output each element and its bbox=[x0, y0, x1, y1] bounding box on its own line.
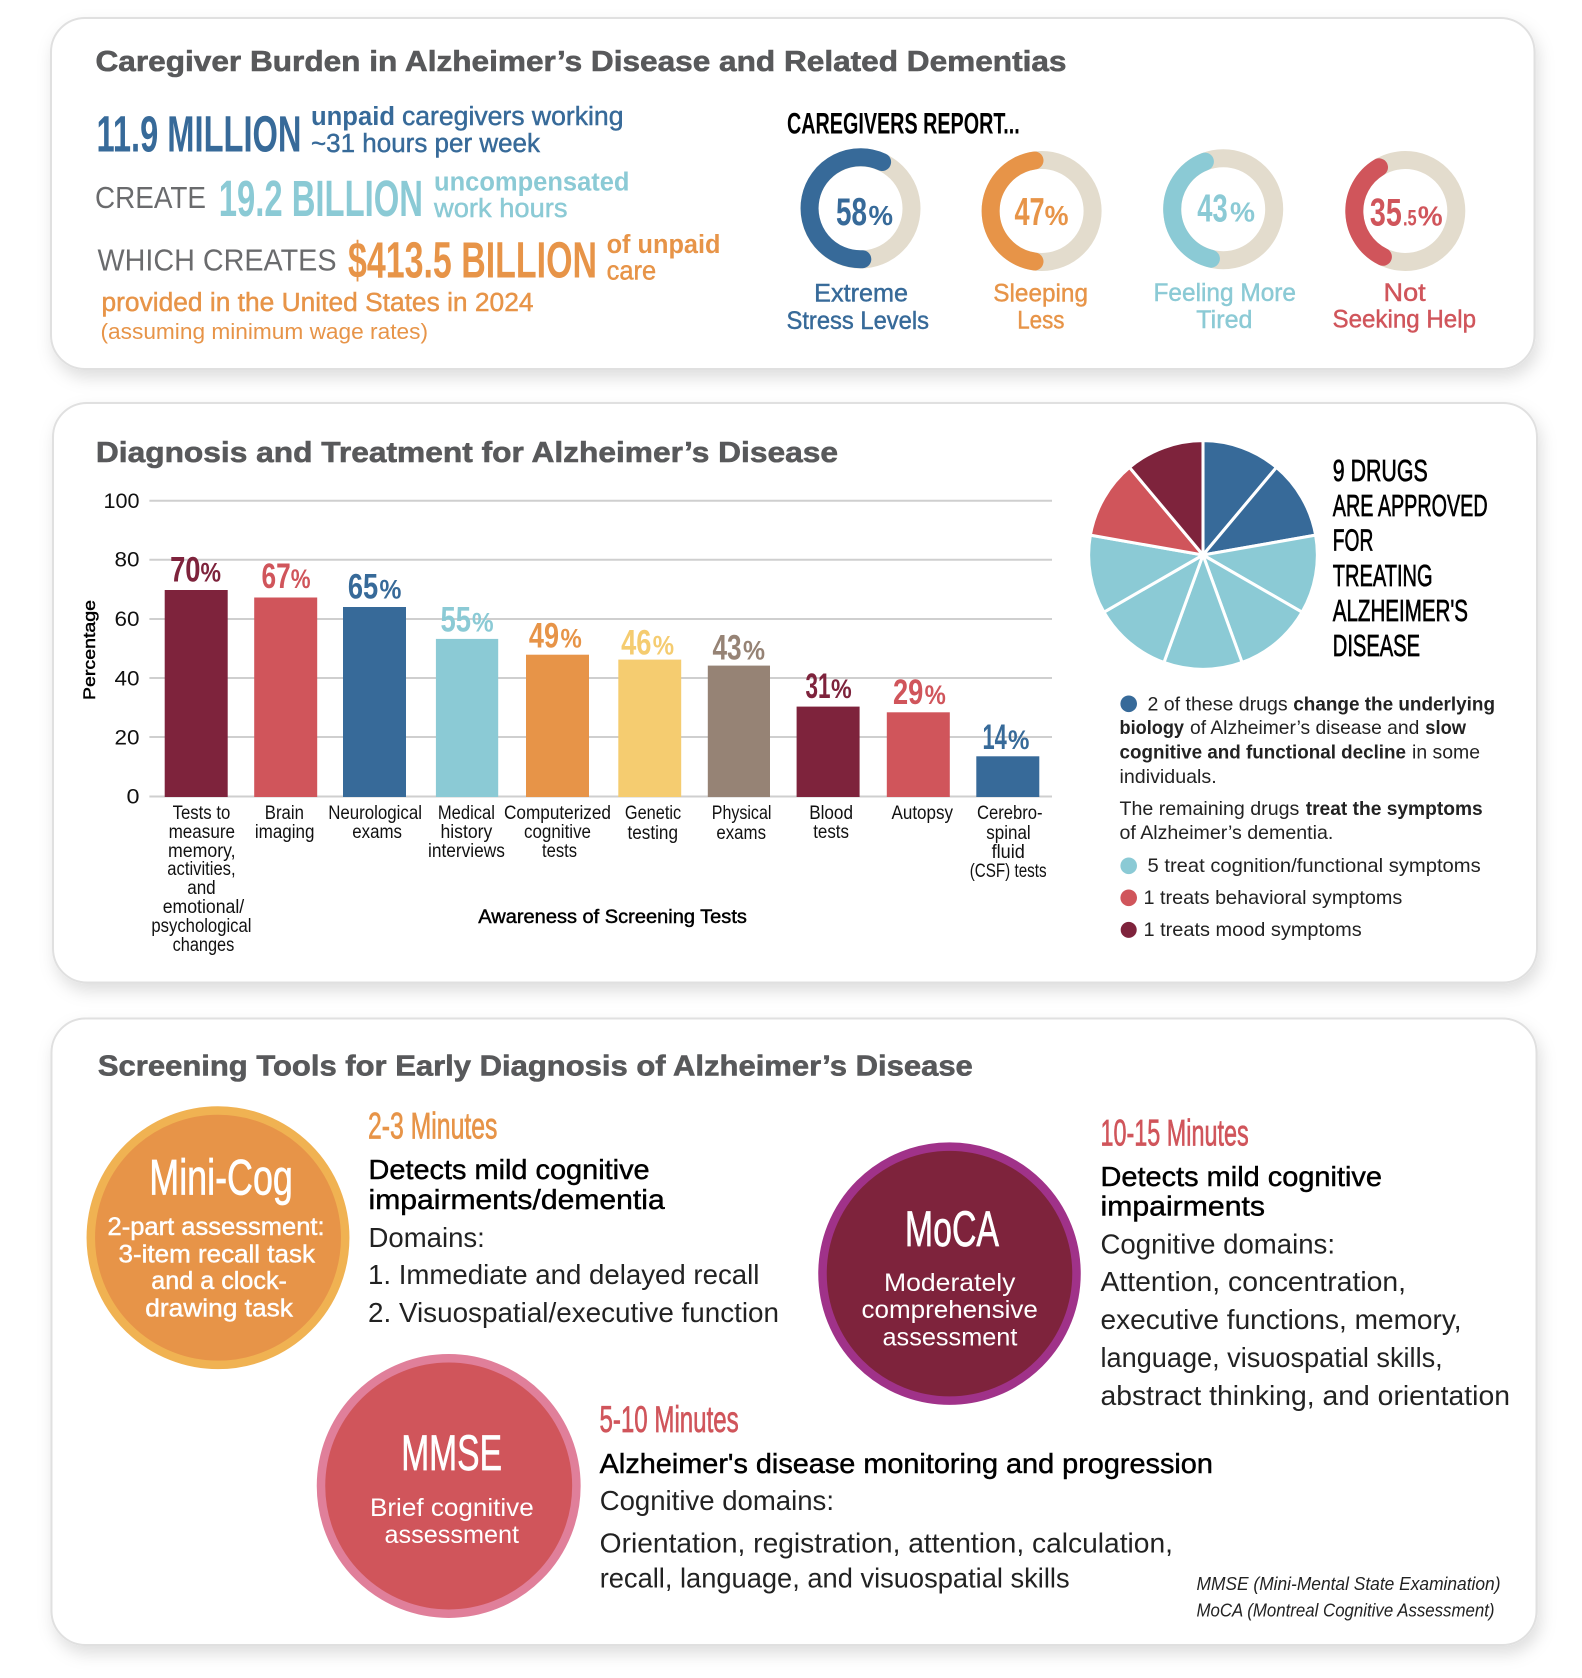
bar: cerebrospinal fluid tests 14%: fluid bbox=[992, 842, 1025, 863]
bar: computerized cognitive tests 49%: tests bbox=[542, 841, 577, 862]
donut: not seeking help 35.5%: % bbox=[1418, 201, 1443, 232]
text block: Mini-Cog details: 2-3 Minutes bbox=[368, 1106, 497, 1146]
donut: sleeping less 47% bbox=[991, 160, 1093, 334]
legend item: blue, disease modifying: of Alzheimer’s disease and bbox=[1190, 717, 1419, 739]
bar: tests to measure memory 70%: and bbox=[187, 878, 216, 899]
legend item: blue, disease modifying: individuals. bbox=[1120, 766, 1217, 788]
bar: tests to measure memory 70%: 70 bbox=[170, 551, 200, 590]
bar: physical exams 43% bbox=[708, 629, 771, 844]
text block: MoCA details: executive functions, memory, bbox=[1100, 1304, 1462, 1335]
bar: physical exams 43%: % bbox=[743, 636, 765, 666]
pie chart: 9 approved drugs bbox=[1089, 441, 1317, 669]
text block: Mini-Cog details: impairments/dementia bbox=[368, 1184, 665, 1215]
pie title: 9 drugs approved: ARE APPROVED bbox=[1333, 488, 1488, 523]
panel background bbox=[53, 403, 1537, 982]
text block: MoCA details: Cognitive domains: bbox=[1100, 1229, 1335, 1260]
bar: medical history interviews 55%: % bbox=[472, 607, 494, 637]
text block: MMSE details: Orientation, registration, attention, calculation, bbox=[600, 1528, 1173, 1558]
text block: MoCA details: abstract thinking, and orientation bbox=[1100, 1380, 1510, 1411]
donut: extreme stress levels 58% bbox=[786, 157, 929, 335]
bar: medical history interviews 55%: history bbox=[440, 822, 493, 843]
bar chart: awareness of screening tests bbox=[80, 490, 1052, 956]
donut: not seeking help 35.5%: .5 bbox=[1403, 206, 1417, 231]
pie title: 9 drugs approved: DISEASE bbox=[1333, 628, 1420, 663]
donut: extreme stress levels 58%: 58 bbox=[836, 191, 867, 234]
circle: MoCA: Moderately bbox=[884, 1269, 1016, 1297]
bar: physical exams 43%: Physical bbox=[712, 803, 771, 824]
circle: Mini-Cog: 2-part assessment: bbox=[108, 1213, 325, 1241]
y axis ticks bbox=[104, 490, 140, 808]
bar: genetic testing 46%: 46 bbox=[621, 624, 651, 663]
bar: autopsy 29%: % bbox=[925, 680, 946, 710]
bar: medical history interviews 55%: Medical bbox=[438, 803, 495, 824]
legend item: red, behavioral: 1 treats behavioral symptoms bbox=[1144, 887, 1403, 909]
stat: 19.2 billion work hours: uncompensated bbox=[434, 168, 630, 196]
legend: drug categories bbox=[1120, 693, 1495, 941]
footnote: abbreviations: MMSE (Mini-Mental State Examination) bbox=[1196, 1573, 1500, 1594]
y axis ticks: 80 bbox=[114, 549, 140, 572]
legend item: blue, disease modifying: cognitive and functional decline bbox=[1120, 742, 1406, 764]
stat: 11.9 million caregivers: caregivers working bbox=[402, 103, 624, 131]
circle: Mini-Cog bbox=[91, 1110, 345, 1365]
text block: Mini-Cog details: Domains: bbox=[368, 1222, 485, 1253]
stat: 11.9 million caregivers: unpaid bbox=[311, 103, 395, 131]
donut: sleeping less 47%: Less bbox=[1017, 306, 1064, 334]
bar: genetic testing 46%: testing bbox=[628, 823, 678, 844]
heading: caregiver burden: Caregiver Burden in Alzheimer’s Disease and Related Dementias bbox=[96, 46, 1066, 78]
panel: caregiver burden bbox=[51, 18, 1534, 369]
donut: not seeking help 35.5%: Not bbox=[1384, 279, 1426, 307]
stat: 11.9 million caregivers: 11.9 MILLION bbox=[96, 106, 302, 162]
bar: cerebrospinal fluid tests 14%: % bbox=[1008, 725, 1029, 755]
text block: MoCA details: Attention, concentration, bbox=[1100, 1266, 1406, 1297]
bar: autopsy 29% bbox=[887, 673, 953, 824]
bar: neurological exams 65%: Neurological bbox=[328, 803, 422, 824]
legend text: remaining drugs: treat the symptoms bbox=[1306, 798, 1483, 820]
bar: tests to measure memory 70%: memory, bbox=[168, 841, 236, 862]
heading: screening tools: Screening Tools for Early Diagnosis of Alzheimer’s Disease bbox=[98, 1050, 973, 1082]
stat: 19.2 billion work hours: work hours bbox=[433, 195, 568, 223]
pie title: 9 drugs approved bbox=[1333, 453, 1488, 663]
bar: tests to measure memory 70%: emotional/ bbox=[163, 897, 245, 918]
legend item: teal, cognition: 5 treat cognition/functional symptoms bbox=[1148, 855, 1481, 877]
donut: extreme stress levels 58%: % bbox=[868, 200, 893, 231]
legend text: remaining drugs: The remaining drugs bbox=[1120, 798, 1300, 820]
bar: autopsy 29%: Autopsy bbox=[892, 803, 953, 824]
bar: tests to measure memory 70%: % bbox=[200, 558, 221, 588]
footnote: abbreviations: MoCA (Montreal Cognitive Assessment) bbox=[1196, 1600, 1494, 1620]
stat: 413.5 billion unpaid care: WHICH CREATES bbox=[98, 243, 336, 278]
panel background bbox=[51, 18, 1534, 369]
stat: 11.9 million caregivers: ~31 hours per week bbox=[311, 130, 540, 158]
circle: Mini-Cog: Mini-Cog bbox=[149, 1150, 293, 1206]
bar: medical history interviews 55% bbox=[428, 600, 505, 862]
pie title: 9 drugs approved: ALZHEIMER'S bbox=[1333, 593, 1468, 628]
donut: extreme stress levels 58%: Stress Levels bbox=[786, 307, 929, 335]
text block: MoCA details: impairments bbox=[1100, 1191, 1265, 1222]
legend item: blue, disease modifying: biology bbox=[1120, 717, 1184, 739]
legend text: remaining drugs: of Alzheimer’s dementia. bbox=[1120, 822, 1333, 844]
y axis ticks: 100 bbox=[104, 490, 140, 513]
pie title: 9 drugs approved: 9 DRUGS bbox=[1333, 453, 1428, 488]
donut: feeling more tired 43%: % bbox=[1230, 197, 1255, 228]
bar: computerized cognitive tests 49% bbox=[504, 617, 611, 862]
donut: not seeking help 35.5%: 35 bbox=[1370, 192, 1402, 235]
bar: tests to measure memory 70%: Tests to bbox=[173, 803, 230, 824]
y axis title: Percentage bbox=[80, 600, 99, 700]
legend item: blue, disease modifying: 2 of these drugs bbox=[1148, 693, 1288, 715]
bar: genetic testing 46%: Genetic bbox=[625, 803, 681, 824]
bar: brain imaging 67%: Brain bbox=[265, 803, 304, 824]
text block: MMSE details bbox=[600, 1399, 1213, 1593]
circle: MMSE bbox=[321, 1358, 576, 1614]
bar: blood tests 31%: tests bbox=[813, 822, 849, 843]
bar: computerized cognitive tests 49%: % bbox=[560, 624, 582, 654]
circle: MMSE: MMSE bbox=[401, 1425, 502, 1481]
bar: tests to measure memory 70%: measure bbox=[169, 822, 235, 843]
stat: 413.5 billion unpaid care bbox=[98, 231, 720, 344]
x axis title: Awareness of Screening Tests bbox=[478, 907, 747, 928]
y axis ticks: 40 bbox=[114, 667, 140, 690]
circle: MMSE: Brief cognitive bbox=[370, 1494, 534, 1522]
donut: not seeking help 35.5%: Seeking Help bbox=[1332, 306, 1476, 334]
bar: physical exams 43%: 43 bbox=[712, 629, 742, 668]
stat: 11.9 million caregivers bbox=[96, 103, 624, 162]
circle: MoCA: assessment bbox=[882, 1324, 1017, 1352]
bar: computerized cognitive tests 49%: Computerized bbox=[504, 803, 611, 824]
text block: MMSE details: 5-10 Minutes bbox=[600, 1399, 739, 1440]
bar: computerized cognitive tests 49%: cognitive bbox=[524, 822, 591, 843]
donut: sleeping less 47%: Sleeping bbox=[993, 280, 1088, 308]
text block: MoCA details: language, visuospatial skills, bbox=[1100, 1342, 1443, 1373]
legend item: blue, disease modifying: change the underlying bbox=[1293, 693, 1495, 715]
text block: Mini-Cog details bbox=[368, 1106, 779, 1328]
circle: Mini-Cog: drawing task bbox=[145, 1294, 293, 1322]
stat: 413.5 billion unpaid care: care bbox=[607, 258, 656, 286]
bar: brain imaging 67%: 67 bbox=[262, 557, 291, 596]
bar: brain imaging 67%: imaging bbox=[255, 822, 314, 843]
stat: 413.5 billion unpaid care: of unpaid bbox=[607, 231, 720, 259]
panel: screening tools bbox=[52, 1018, 1536, 1645]
text block: Mini-Cog details: 2. Visuospatial/executive function bbox=[368, 1297, 779, 1328]
bar: tests to measure memory 70%: changes bbox=[173, 935, 234, 956]
bar: medical history interviews 55%: 55 bbox=[440, 600, 471, 639]
legend item: blue, disease modifying bbox=[1120, 693, 1495, 788]
panel background bbox=[52, 1018, 1536, 1645]
y axis ticks: 20 bbox=[114, 726, 140, 749]
donut: sleeping less 47%: % bbox=[1045, 200, 1069, 231]
legend item: blue, disease modifying: in some bbox=[1412, 742, 1480, 764]
text block: MoCA details: Detects mild cognitive bbox=[1100, 1161, 1382, 1192]
circle: Mini-Cog: 3-item recall task bbox=[118, 1240, 316, 1268]
circle: MoCA: comprehensive bbox=[862, 1296, 1038, 1324]
bar: neurological exams 65% bbox=[328, 567, 422, 843]
legend text: remaining drugs bbox=[1120, 798, 1483, 844]
stat: 413.5 billion unpaid care: $413.5 BILLION bbox=[348, 232, 597, 289]
bar: neurological exams 65%: % bbox=[380, 574, 401, 604]
bar: cerebrospinal fluid tests 14%: spinal bbox=[986, 823, 1031, 844]
donut: feeling more tired 43%: 43 bbox=[1197, 188, 1228, 231]
y axis ticks: 0 bbox=[126, 786, 140, 808]
legend item: maroon, mood: 1 treats mood symptoms bbox=[1144, 919, 1362, 941]
bar: genetic testing 46% bbox=[618, 624, 681, 844]
donut: sleeping less 47%: 47 bbox=[1014, 191, 1045, 234]
panel: diagnosis and treatment bbox=[53, 403, 1537, 982]
donut: feeling more tired 43% bbox=[1154, 158, 1296, 334]
heading: diagnosis and treatment: Diagnosis and Treatment for Alzheimer’s Disease bbox=[96, 437, 838, 469]
stat: 19.2 billion work hours bbox=[95, 168, 630, 227]
y axis ticks: 60 bbox=[114, 608, 140, 631]
legend item: blue, disease modifying: slow bbox=[1425, 717, 1467, 739]
bar: tests to measure memory 70%: activities, bbox=[167, 859, 236, 880]
bar: genetic testing 46%: % bbox=[653, 631, 674, 661]
stat: 413.5 billion unpaid care: (assuming minimum wage rates) bbox=[100, 319, 428, 344]
bar: computerized cognitive tests 49%: 49 bbox=[529, 617, 559, 656]
circle: Mini-Cog: and a clock- bbox=[151, 1267, 287, 1295]
circle: MMSE: assessment bbox=[384, 1521, 519, 1549]
bar: blood tests 31% bbox=[797, 667, 860, 843]
bar: blood tests 31%: 31 bbox=[806, 667, 830, 706]
text block: MMSE details: Cognitive domains: bbox=[600, 1485, 834, 1516]
bar: autopsy 29%: 29 bbox=[893, 673, 923, 712]
circle: MoCA bbox=[822, 1147, 1076, 1401]
bar: cerebrospinal fluid tests 14%: (CSF) tests bbox=[970, 861, 1047, 882]
stat: 413.5 billion unpaid care: provided in the United States in 2024 bbox=[102, 289, 534, 317]
text block: MMSE details: Alzheimer's disease monitoring and progression bbox=[600, 1448, 1213, 1479]
pie title: 9 drugs approved: TREATING bbox=[1333, 558, 1433, 593]
bar: medical history interviews 55%: interviews bbox=[428, 841, 505, 862]
bar: brain imaging 67% bbox=[254, 557, 317, 843]
pie title: 9 drugs approved: FOR bbox=[1333, 522, 1373, 558]
bar: tests to measure memory 70%: psychological bbox=[151, 916, 252, 937]
bar: cerebrospinal fluid tests 14% bbox=[970, 718, 1047, 882]
donut: feeling more tired 43%: Feeling More bbox=[1154, 279, 1296, 307]
bar: cerebrospinal fluid tests 14%: 14 bbox=[982, 718, 1007, 757]
bar: blood tests 31%: Blood bbox=[809, 803, 853, 824]
donut: not seeking help 35.5% bbox=[1332, 160, 1476, 334]
stat: 19.2 billion work hours: 19.2 BILLION bbox=[219, 170, 423, 227]
bar: neurological exams 65%: exams bbox=[352, 822, 402, 843]
stat: 19.2 billion work hours: CREATE bbox=[95, 180, 206, 215]
donut: extreme stress levels 58%: Extreme bbox=[814, 280, 908, 308]
text block: Mini-Cog details: 1. Immediate and delayed recall bbox=[368, 1259, 759, 1290]
bar: brain imaging 67%: % bbox=[291, 564, 310, 594]
donut: feeling more tired 43%: Tired bbox=[1196, 306, 1252, 334]
bar: physical exams 43%: exams bbox=[716, 823, 766, 844]
circle: MoCA: MoCA bbox=[905, 1201, 999, 1257]
bar: blood tests 31%: % bbox=[831, 674, 852, 704]
bar: tests to measure memory 70% bbox=[151, 551, 252, 956]
heading: caregivers report: CAREGIVERS REPORT... bbox=[787, 108, 1020, 140]
bar: neurological exams 65%: 65 bbox=[348, 567, 378, 606]
bar: cerebrospinal fluid tests 14%: Cerebro- bbox=[977, 803, 1043, 824]
text block: MoCA details bbox=[1100, 1112, 1510, 1411]
text block: Mini-Cog details: Detects mild cognitive bbox=[368, 1154, 650, 1185]
text block: MoCA details: 10-15 Minutes bbox=[1100, 1112, 1249, 1154]
text block: MMSE details: recall, language, and visuospatial skills bbox=[600, 1562, 1070, 1593]
footnote: abbreviations bbox=[1196, 1573, 1500, 1620]
